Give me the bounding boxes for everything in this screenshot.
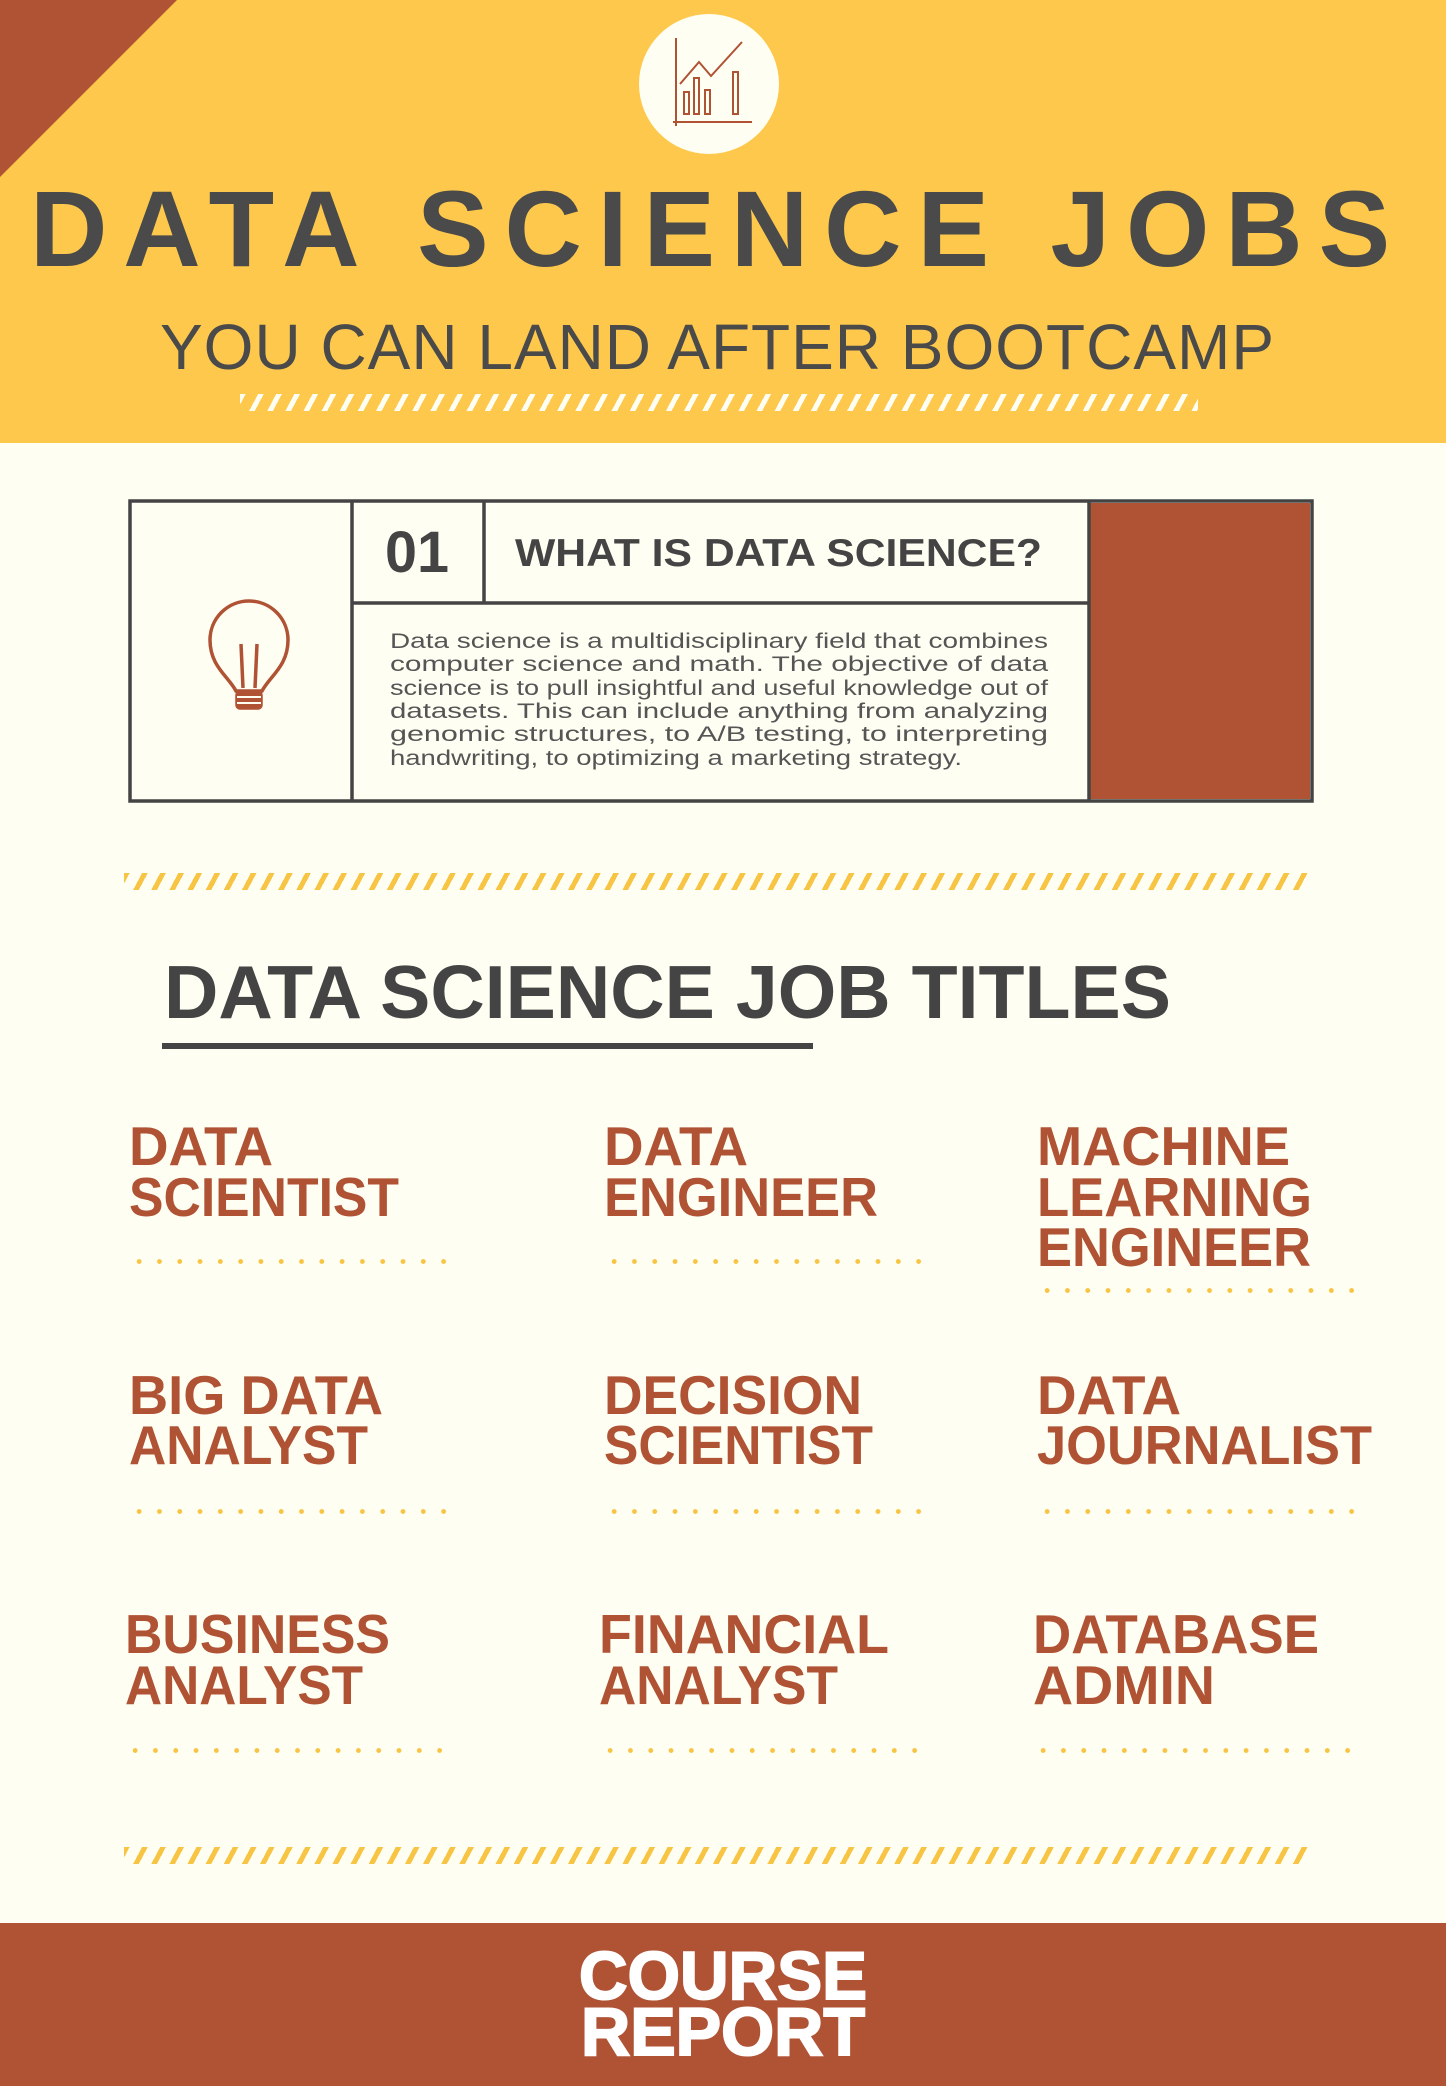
job: data scientist: DATA (129, 1115, 273, 1177)
icon: chart circle (639, 14, 779, 154)
job: decision scientist: DECISION (604, 1364, 862, 1426)
job: financial analyst: FINANCIAL (599, 1603, 889, 1665)
job: decision scientist (604, 1364, 873, 1476)
footer band (0, 1923, 1446, 2086)
icon: light bulb (210, 601, 288, 708)
panel heading: WHAT IS DATA SCIENCE? (515, 532, 1042, 575)
job: database admin: DATABASE (1033, 1603, 1319, 1665)
job: machine learning engineer: MACHINE (1037, 1115, 1290, 1177)
job: machine learning engineer: LEARNING (1037, 1166, 1312, 1228)
number: 01 (385, 520, 449, 585)
job: data scientist (129, 1115, 399, 1228)
job: business analyst: BUSINESS (125, 1603, 390, 1665)
job: machine learning engineer (1037, 1115, 1312, 1278)
job: data scientist: SCIENTIST (129, 1166, 399, 1228)
job: database admin: ADMIN (1033, 1654, 1215, 1716)
header band (0, 0, 1446, 443)
job: financial analyst: ANALYST (599, 1654, 838, 1716)
job titles (125, 1115, 1372, 1716)
footer logo: REPORT (581, 1994, 865, 2070)
paragraph: definition: datasets. This can include anything from analyzing (390, 700, 1048, 723)
paragraph: definition: genomic structures, to A/B testing, to interpreting (390, 723, 1048, 746)
footer logo: COURSE (579, 1938, 867, 2014)
section heading: DATA SCIENCE JOB TITLES (164, 950, 1171, 1034)
job: business analyst (125, 1603, 390, 1716)
job: big data analyst: BIG DATA (129, 1364, 383, 1426)
subtitle: YOU CAN LAND AFTER BOOTCAMP (160, 311, 1274, 383)
job: data engineer: DATA (604, 1115, 748, 1177)
paragraph: definition: computer science and math. The objective of data (390, 653, 1048, 676)
job: data journalist: DATA (1037, 1364, 1181, 1426)
job: database admin (1033, 1603, 1319, 1716)
paragraph: definition: science is to pull insightful and useful knowledge out of (390, 677, 1048, 700)
job: decision scientist: SCIENTIST (604, 1414, 873, 1476)
title: DATA SCIENCE JOBS (30, 168, 1406, 289)
footer logo (579, 1938, 867, 2070)
job: business analyst: ANALYST (125, 1654, 363, 1716)
job: data engineer: ENGINEER (604, 1166, 878, 1228)
paragraph: definition (390, 630, 1048, 770)
job: big data analyst: ANALYST (129, 1414, 368, 1476)
corner triangle (0, 0, 177, 177)
job: data engineer (604, 1115, 878, 1228)
panel: what is data science (130, 501, 1312, 801)
paragraph: definition: handwriting, to optimizing a marketing strategy. (390, 747, 962, 770)
paragraph: definition: Data science is a multidisciplinary field that combines (390, 630, 1048, 653)
job: financial analyst (599, 1603, 889, 1716)
job: machine learning engineer: ENGINEER (1037, 1216, 1311, 1278)
job: big data analyst (129, 1364, 383, 1476)
job: data journalist (1037, 1364, 1372, 1476)
job: data journalist: JOURNALIST (1037, 1414, 1372, 1476)
